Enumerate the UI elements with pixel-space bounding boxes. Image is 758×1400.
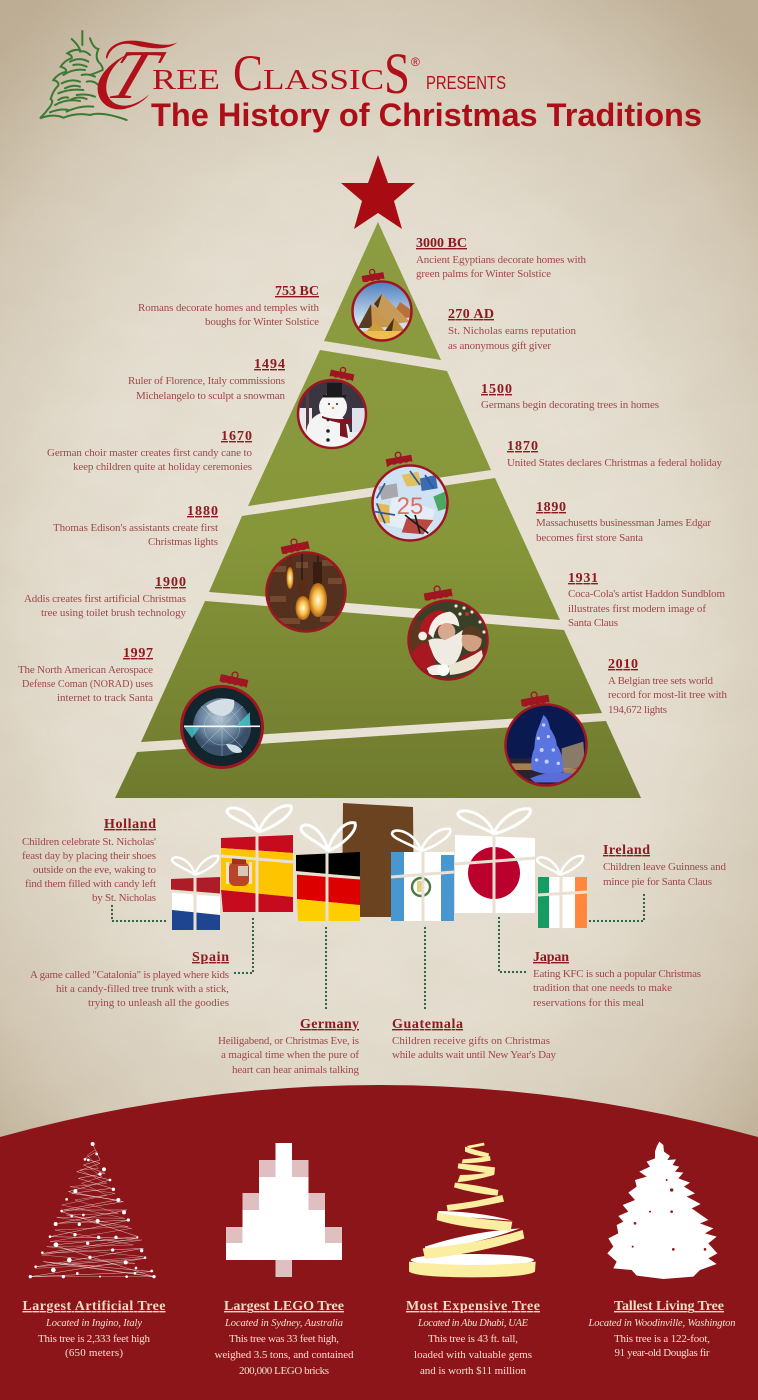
tradition: Ireland: Children leave Guinness and: [603, 861, 726, 873]
tradition: Ireland: [603, 843, 726, 888]
icon: largest artificial tree: [29, 1142, 156, 1278]
ornament: record blue-lit tree: [505, 690, 588, 786]
timeline: 3000 BC: 3000 BC: [416, 236, 467, 251]
icon: logo fir tree: [40, 31, 127, 120]
timeline: 1890: Massachusetts businessman James Edgar: [536, 517, 711, 529]
timeline: 3000 BC: green palms for Winter Solstice: [416, 268, 551, 280]
timeline: 1997: [18, 646, 153, 704]
timeline: 270 AD: [448, 307, 576, 352]
tradition: Holland: Holland: [104, 817, 156, 832]
record: largest LEGO tree: 200,000 LEGO bricks: [239, 1365, 329, 1377]
tradition: Germany: heart can hear animals talking: [232, 1064, 360, 1076]
logo wordmark: C: [233, 46, 263, 102]
presents label: PRESENTS: [426, 73, 506, 93]
gift: Holland flag: [171, 856, 220, 931]
christmas tree: [115, 222, 641, 798]
timeline: 1931: 1931: [568, 571, 598, 586]
timeline: 2010: 2010: [608, 657, 638, 672]
tradition: Ireland: Ireland: [603, 843, 650, 858]
logo wordmark: ®: [411, 55, 420, 69]
tradition: Spain: A game called "Catalonia" is played where kids: [30, 969, 229, 981]
record: largest artificial tree: This tree is 2,333 feet high: [38, 1333, 150, 1345]
timeline: 2010: 194,672 lights: [608, 704, 667, 716]
timeline: 1997: Defense Coman (NORAD) uses: [22, 678, 153, 690]
ornament: Santa Claus: [408, 584, 488, 680]
timeline: 1880: Christmas lights: [148, 536, 218, 548]
timeline: 3000 BC: [416, 236, 586, 280]
record: most expensive tree: This tree is 43 ft. tall,: [428, 1333, 518, 1345]
gift: Guatemala flag: [391, 829, 454, 922]
timeline: 1900: Addis creates first artificial Christmas: [24, 593, 186, 605]
timeline: 2010: record for most-lit tree with: [608, 689, 728, 701]
timeline: 753 BC: 753 BC: [275, 284, 319, 299]
timeline: 270 AD: St. Nicholas earns reputation: [448, 325, 576, 337]
timeline: 1890: 1890: [536, 500, 566, 515]
record: tallest living tree: Located in Woodinville, Washington: [588, 1318, 736, 1329]
ornament: pyramids: [351, 268, 413, 342]
timeline: 1670: [47, 429, 252, 473]
gift: Ireland flag: [537, 856, 587, 929]
ornament: December 25 presents: [371, 450, 449, 542]
dotted connector lines: [112, 893, 644, 1012]
panel: record trees: [0, 1085, 758, 1400]
logo wordmark: LASSIC: [263, 64, 384, 96]
timeline: 1500: 1500: [481, 382, 512, 397]
tradition: Holland: [22, 817, 156, 904]
timeline: 1494: 1494: [254, 357, 285, 372]
timeline: 1890: [536, 500, 711, 544]
record: most expensive tree: Most Expensive Tree: [406, 1299, 540, 1314]
timeline: 1494: Ruler of Florence, Italy commissions: [128, 375, 285, 387]
ornament: December 25 presents: 25: [397, 493, 423, 520]
tradition: Guatemala: while adults wait until New Year's Day: [392, 1049, 556, 1061]
tradition: Germany: [218, 1017, 360, 1076]
timeline: 1670: German choir master creates first candy cane to: [47, 447, 252, 459]
timeline: 1670: 1670: [221, 429, 252, 444]
timeline: 1997: The North American Aerospace: [18, 664, 153, 676]
tradition: Germany: Germany: [300, 1017, 359, 1032]
timeline: 1900: tree using toilet brush technology: [41, 607, 186, 619]
record: most expensive tree: Located in Abu Dhabi, UAE: [417, 1318, 529, 1329]
timeline: 1870: 1870: [507, 439, 538, 454]
timeline: 1500: [481, 382, 659, 411]
tradition: Spain: trying to unleash all the goodies: [88, 997, 229, 1009]
title: The History of Christmas Traditions: [151, 97, 702, 133]
logo wordmark: S: [384, 41, 410, 106]
ornament: Edison light bulbs: [266, 536, 346, 632]
gift: Spain flag: [221, 806, 293, 913]
tradition: Holland: by St. Nicholas: [92, 892, 156, 904]
timeline: 1900: [24, 575, 186, 619]
timeline: 3000 BC: Ancient Egyptians decorate homes with: [416, 254, 586, 266]
timeline: 1870: United States declares Christmas a federal holiday: [507, 457, 722, 469]
red curved band: [0, 1085, 758, 1400]
icon: tallest living tree: [607, 1142, 717, 1279]
logo wordmark: [90, 37, 420, 114]
tradition: Holland: feast day by placing their shoes: [22, 850, 156, 862]
tradition: Ireland: mince pie for Santa Claus: [603, 876, 712, 888]
tradition: Japan: reservations for this meal: [533, 997, 644, 1009]
record: most expensive tree: and is worth $11 million: [420, 1365, 526, 1377]
tradition: Spain: [30, 950, 229, 1009]
record: largest LEGO tree: This tree was 33 feet high,: [229, 1333, 339, 1345]
icon: largest LEGO tree: [226, 1143, 342, 1277]
record: largest LEGO tree: Located in Sydney, Australia: [224, 1318, 343, 1329]
timeline: 270 AD: as anonymous gift giver: [448, 340, 551, 352]
tradition: Holland: Children celebrate St. Nicholas': [22, 836, 156, 848]
timeline: 1997: 1997: [123, 646, 153, 661]
icon: brown tree-trunk box: [342, 803, 414, 917]
record: largest LEGO tree: Largest LEGO Tree: [224, 1299, 344, 1314]
tradition: Japan: tradition that one needs to make: [533, 982, 672, 994]
tradition: Guatemala: Children receive gifts on Christmas: [392, 1035, 550, 1047]
tradition: Guatemala: Guatemala: [392, 1017, 463, 1032]
timeline: 753 BC: [138, 284, 320, 328]
timeline: 1880: Thomas Edison's assistants create first: [53, 522, 218, 534]
timeline: 1890: becomes first store Santa: [536, 532, 643, 544]
timeline: 753 BC: Romans decorate homes and temples with: [138, 302, 320, 314]
timeline: 1670: keep children quite at holiday ceremonies: [73, 461, 252, 473]
timeline: 270 AD: 270 AD: [448, 307, 494, 322]
logo wordmark: T: [90, 37, 177, 114]
timeline: 1870: [507, 439, 722, 469]
timeline: 1494: Michelangelo to sculpt a snowman: [136, 390, 286, 402]
record: most expensive tree: [406, 1299, 540, 1377]
timeline: 1494: [128, 357, 286, 402]
tradition: Germany: Heiligabend, or Christmas Eve, is: [218, 1035, 359, 1047]
timeline: 1931: illustrates first modern image of: [568, 603, 706, 615]
icon: most expensive ribbon tree: [409, 1143, 536, 1277]
timeline: 1931: Coca-Cola's artist Haddon Sundblom: [568, 588, 725, 600]
tradition: Holland: outside on the eve, waking to: [33, 864, 156, 876]
record: largest artificial tree: [22, 1299, 166, 1359]
record: tallest living tree: [588, 1299, 736, 1359]
logo T swash: [98, 41, 177, 109]
record: largest LEGO tree: [214, 1299, 354, 1377]
tradition: Spain: hit a candy-filled tree trunk with a stick,: [56, 983, 229, 995]
record: tallest living tree: 91 year-old Douglas fir: [614, 1347, 710, 1359]
timeline: 1880: [53, 504, 218, 548]
record: most expensive tree: loaded with valuable gems: [414, 1349, 532, 1361]
icon: tree-top star: [341, 155, 415, 229]
timeline: 1900: 1900: [155, 575, 186, 590]
record: largest LEGO tree: weighed 3.5 tons, and contained: [214, 1349, 354, 1361]
tradition: Japan: Eating KFC is such a popular Christmas: [533, 968, 701, 980]
timeline: 2010: A Belgian tree sets world: [608, 675, 714, 687]
tradition: Guatemala: [392, 1017, 556, 1061]
record: largest artificial tree: Largest Artificial Tree: [22, 1299, 166, 1314]
timeline: 1931: [568, 571, 725, 629]
tradition: Holland: find them filled with candy left: [25, 878, 156, 890]
gift: Germany flag: [296, 823, 360, 922]
tradition: Spain: Spain: [192, 950, 229, 965]
tradition: Japan: Japan: [533, 950, 569, 965]
ornament: NORAD radar globe: [181, 669, 263, 768]
ornament: snowman: [298, 365, 366, 456]
tradition: Japan: [533, 950, 701, 1009]
timeline: 2010: [608, 657, 728, 716]
tradition: Germany: a magical time when the pure of: [221, 1049, 359, 1061]
record: tallest living tree: This tree is a 122-foot,: [614, 1333, 710, 1345]
logo: Tree Classics: [40, 31, 506, 120]
gift: Japan flag: [455, 809, 535, 914]
logo wordmark: REE: [152, 64, 220, 96]
timeline: 1997: internet to track Santa: [57, 692, 153, 704]
timeline: 753 BC: boughs for Winter Solstice: [205, 316, 319, 328]
timeline: 1500: Germans begin decorating trees in homes: [481, 399, 659, 411]
timeline: 1880: 1880: [187, 504, 218, 519]
record: tallest living tree: Tallest Living Tree: [614, 1299, 724, 1314]
record: largest artificial tree: Located in Ingino, Italy: [45, 1318, 142, 1329]
record: largest artificial tree: (650 meters): [65, 1347, 123, 1359]
timeline: 1931: Santa Claus: [568, 617, 618, 629]
